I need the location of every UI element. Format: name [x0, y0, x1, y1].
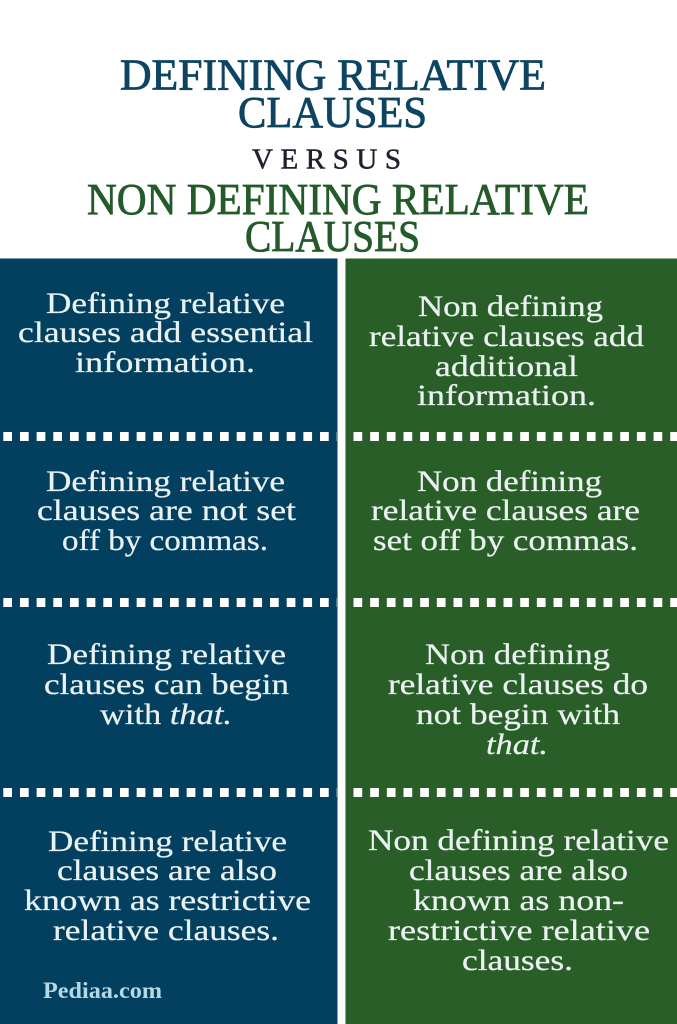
text: defining row 4: known as restrictive — [24, 884, 311, 917]
text: defining row 3: with that. — [100, 698, 232, 731]
text: non defining row 1: relative clauses add — [369, 320, 644, 353]
text: non defining row 1: Non defining — [418, 290, 603, 323]
text: defining row 1 — [18, 287, 313, 379]
text: defining row 2 — [37, 465, 297, 557]
text: non defining row 4: clauses are also — [409, 854, 628, 887]
text: defining row 2: off by commas. — [62, 524, 268, 557]
text: non defining row 4: clauses. — [462, 944, 573, 977]
text: defining row 2: Defining relative — [46, 465, 285, 498]
text: defining row 2: clauses are not set — [37, 494, 297, 527]
text: non defining row 3: that. — [486, 728, 548, 761]
text: non defining row 1 — [369, 290, 644, 412]
title: defining relative clauses: DEFINING RELATIVE — [120, 50, 546, 100]
text: defining row 4: clauses are also — [57, 854, 277, 887]
text: non defining row 2: relative clauses are — [371, 494, 640, 527]
text: non defining row 2: Non defining — [417, 465, 602, 498]
title: defining relative clauses: CLAUSES — [238, 88, 427, 137]
text: non defining row 3: not begin with — [416, 698, 620, 731]
text: non defining row 3: relative clauses do — [388, 668, 648, 701]
text: defining row 3: clauses can begin — [44, 668, 289, 701]
text: defining row 3: Defining relative — [47, 638, 286, 671]
text: defining row 4: Defining relative — [48, 825, 287, 858]
text: defining row 1: clauses add essential — [18, 316, 313, 349]
text: non defining row 3 — [388, 638, 648, 761]
text: defining row 1: Defining relative — [46, 287, 285, 320]
text: non defining row 4 — [368, 824, 669, 977]
heading: versus: VERSUS — [252, 144, 401, 176]
title: non defining relative clauses: NON DEFINING RELATIVE — [87, 175, 589, 224]
text: non defining row 1: information. — [417, 379, 596, 412]
title: defining relative clauses — [120, 50, 546, 137]
text: defining row 3 — [44, 638, 289, 731]
text: non defining row 3: Non defining — [425, 638, 610, 671]
text: non defining row 4: known as non- — [413, 884, 624, 917]
text: non defining row 2: set off by commas. — [373, 524, 638, 557]
logo: Pediaa.com: Pediaa.com — [43, 978, 162, 1003]
title: non defining relative clauses — [87, 175, 589, 261]
text: defining row 4: relative clauses. — [53, 914, 279, 947]
text: non defining row 4: Non defining relative — [368, 824, 669, 857]
text: defining row 1: information. — [75, 346, 255, 379]
panel: defining column background — [0, 258, 338, 1024]
text: defining row 4 — [24, 825, 311, 947]
text: non defining row 2 — [371, 465, 640, 557]
title: non defining relative clauses: CLAUSES — [245, 212, 420, 261]
text: non defining row 1: additional — [435, 350, 578, 383]
text: non defining row 4: restrictive relative — [388, 914, 650, 947]
panel: non defining column background — [346, 258, 677, 1024]
